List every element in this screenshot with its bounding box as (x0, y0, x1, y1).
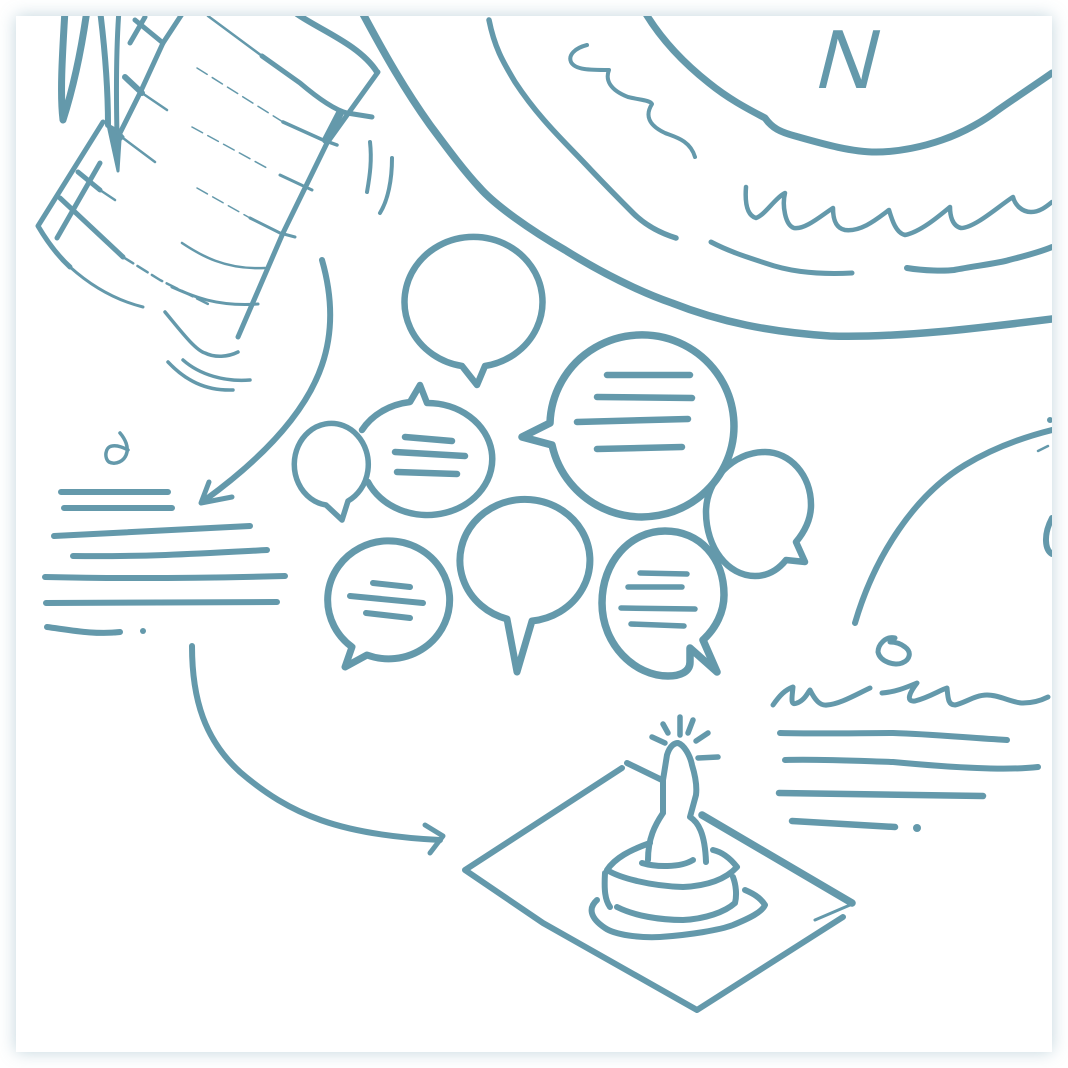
speech bubble: small left (294, 423, 368, 520)
text block: left notes (45, 433, 285, 634)
landmark on map tile (465, 717, 852, 1010)
arrow: notes to landmark (192, 646, 443, 853)
speech bubble: top empty (404, 237, 542, 385)
speech bubble: lower left with lines (328, 541, 450, 667)
speech bubble: large with lines (522, 335, 734, 517)
icon: small loop mark (878, 638, 909, 664)
speech bubble: lower middle empty (460, 499, 590, 672)
compass north letter: N (807, 13, 891, 107)
icon: map curves and compass north (362, 12, 1052, 336)
text block: right notes (773, 638, 1048, 832)
arc and right-edge marks (855, 417, 1053, 623)
speech bubble: lower right with lines (602, 531, 724, 676)
icon: folded map sheet (38, 10, 392, 390)
arrow: map to notes (201, 260, 330, 503)
speech bubble: middle with lines (362, 385, 492, 515)
speech bubble: far right empty (706, 452, 811, 576)
speech bubble cluster (294, 237, 811, 676)
icon: small glyph mark (106, 433, 128, 463)
